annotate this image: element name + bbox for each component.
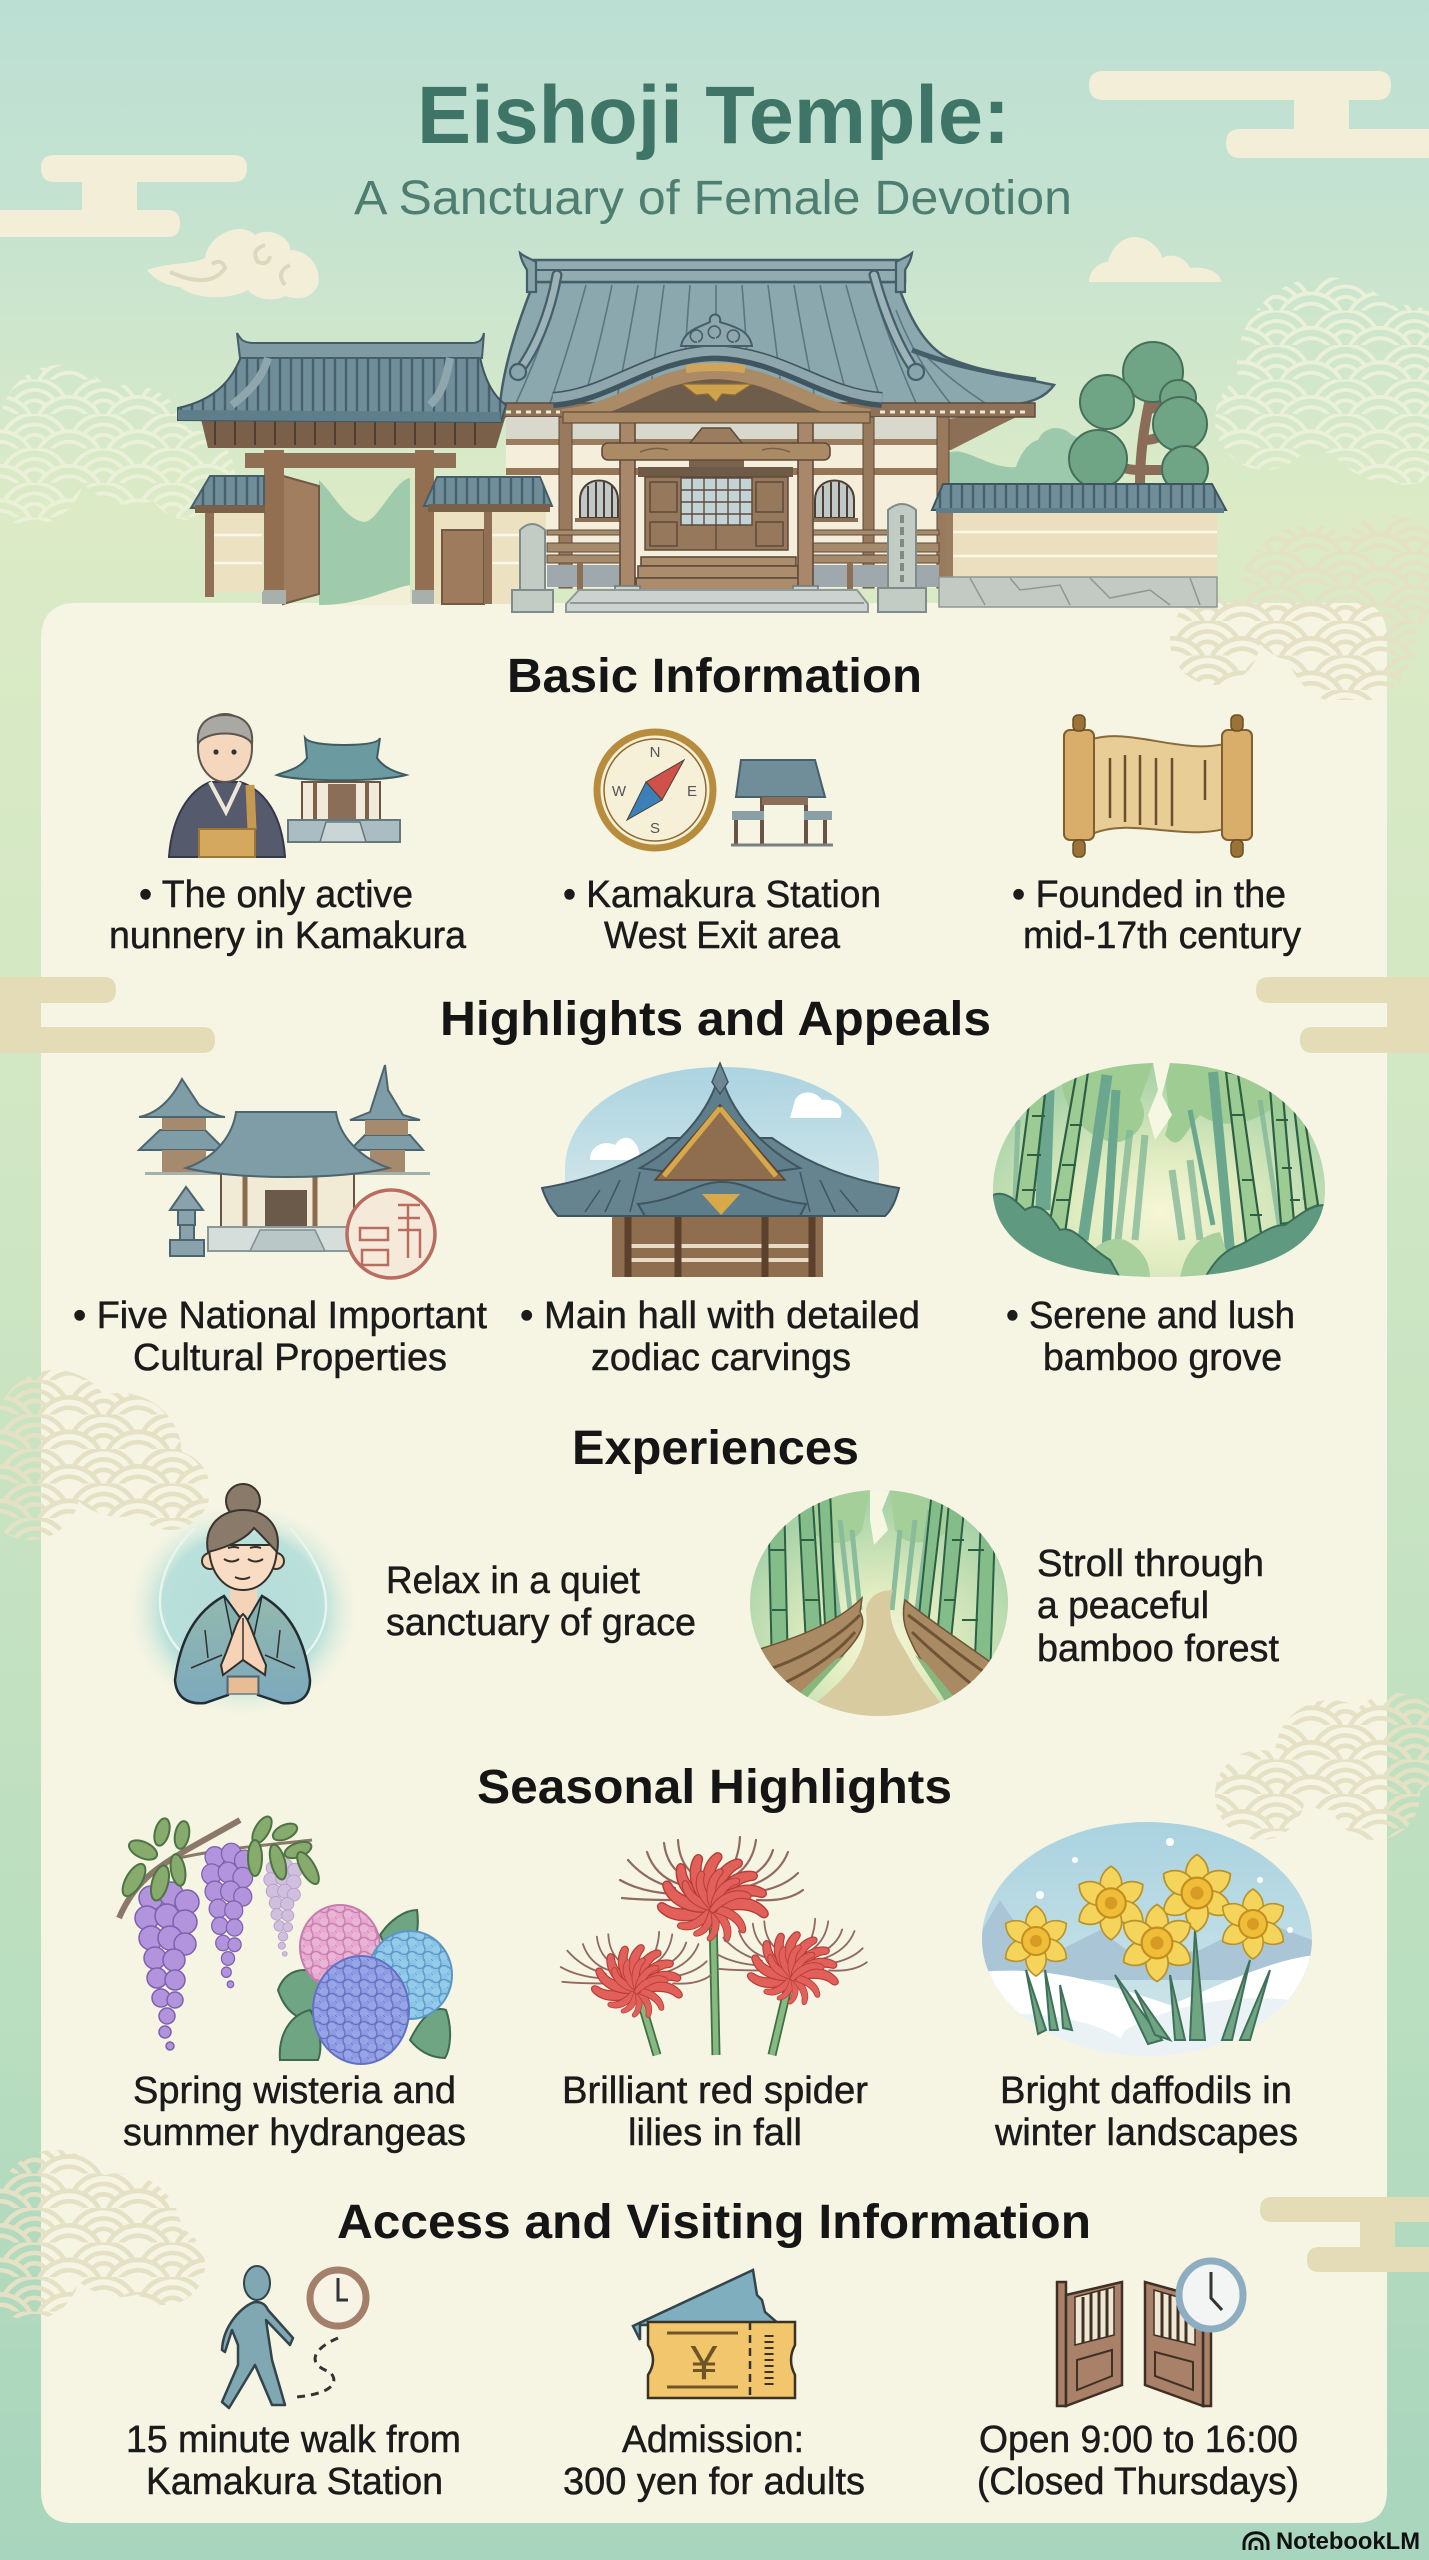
cloud band: middle left [0, 977, 215, 1053]
icon: compass and gate: S [650, 820, 660, 837]
logo: NotebookLM: NotebookLM [1276, 2528, 1420, 2555]
text: grove: • Serene and lush [1006, 1295, 1295, 1337]
text: station: West Exit area [604, 915, 841, 957]
icon: compass and gate: E [687, 783, 697, 800]
icon: red spider lilies [561, 1837, 867, 2055]
text: relax: Relax in a quiet [386, 1560, 640, 1602]
seigaiha pattern: panel left upper [0, 1370, 209, 1540]
text: founded [1012, 874, 1301, 957]
text: stroll [1037, 1543, 1279, 1670]
text: daffodils: winter landscapes [994, 2112, 1298, 2154]
text: grove: bamboo grove [1043, 1337, 1282, 1379]
right wall [932, 484, 1226, 607]
text: grove [1006, 1295, 1295, 1379]
text: spider lilies [562, 2070, 868, 2154]
text: founded: • Founded in the [1012, 874, 1286, 916]
text: nunnery [109, 874, 467, 957]
opening bushes and path [319, 478, 410, 605]
icon: bamboo grove [990, 1060, 1330, 1282]
gable [553, 314, 882, 423]
text: hours [977, 2419, 1299, 2503]
icon: nun and shrine [169, 714, 406, 857]
text: nunnery: nunnery in Kamakura [109, 915, 467, 957]
eaves and hall underside [503, 403, 1035, 450]
text: nunnery: • The only active [139, 874, 413, 916]
text: admission [563, 2419, 865, 2503]
text: admission: Admission: [622, 2419, 804, 2461]
text: admission: 300 yen for adults [563, 2461, 865, 2503]
heading: highlights and appeals: Highlights and Appeals [440, 993, 991, 1046]
icon: compass and gate: N [650, 744, 660, 761]
text: main hall: zodiac carvings [591, 1337, 851, 1379]
text: spider lilies: lilies in fall [628, 2112, 802, 2154]
main roof [500, 253, 1054, 405]
illustration: temple [178, 253, 1226, 612]
text: daffodils [994, 2070, 1298, 2154]
cloud band: middle right [1256, 977, 1429, 1053]
heading: access and visiting information: Access and Visiting Information [337, 2196, 1091, 2249]
icon: open gate and clock [1057, 2261, 1243, 2406]
text: walk: 15 minute walk from [126, 2419, 461, 2461]
text: spider lilies: Brilliant red spider [562, 2070, 868, 2112]
text: main hall: • Main hall with detailed [520, 1295, 920, 1337]
seigaiha pattern: lower right [1150, 510, 1429, 700]
small inner gate [424, 477, 552, 604]
text: wisteria [123, 2070, 466, 2154]
text: properties: Cultural Properties [133, 1337, 447, 1379]
cloud: top left [0, 155, 247, 237]
seigaiha pattern: upper right [1215, 277, 1429, 485]
text: stroll: Stroll through [1037, 1543, 1264, 1585]
text: relax [386, 1560, 696, 1644]
subtitle: A Sanctuary of Female Devotion [354, 172, 1072, 225]
text: properties: • Five National Important [73, 1295, 487, 1337]
text: station [563, 874, 881, 957]
seigaiha pattern: upper left [0, 360, 240, 530]
title: Eishoji Temple: [417, 70, 1010, 161]
icon: compass and gate: W [612, 783, 627, 800]
cloud: small right [1089, 237, 1221, 282]
icon: wisteria and hydrangea [118, 1814, 452, 2064]
icon: main hall under sky [542, 1060, 899, 1277]
icon: bamboo path [750, 1490, 1010, 1716]
heading: seasonal highlights: Seasonal Highlights [477, 1761, 952, 1814]
seigaiha pattern: panel right [1200, 1690, 1429, 1840]
text: walk [126, 2419, 461, 2503]
text: properties [73, 1295, 487, 1379]
icon: ticket: ¥ [690, 2337, 718, 2390]
left side wall [191, 476, 265, 597]
gate [178, 333, 506, 604]
text: hours: (Closed Thursdays) [977, 2461, 1299, 2503]
text: relax: sanctuary of grace [386, 1602, 696, 1644]
monuments [512, 504, 926, 612]
text: station: • Kamakura Station [563, 874, 881, 916]
text: stroll: a peaceful [1037, 1585, 1209, 1627]
icon: ticket [633, 2270, 795, 2398]
icon: compass and gate [597, 732, 833, 848]
tree and bushes [948, 342, 1208, 492]
text: hours: Open 9:00 to 16:00 [979, 2419, 1298, 2461]
cloud: swirl [147, 229, 319, 299]
icon: praying woman [130, 1484, 356, 1714]
panel: content card [41, 603, 1387, 2523]
hall body [506, 417, 949, 612]
icon: walker and clock [222, 2266, 366, 2408]
heading: experiences: Experiences [572, 1422, 859, 1475]
cloud: top right [1089, 71, 1429, 158]
text: walk: Kamakura Station [146, 2461, 443, 2503]
text: main hall [520, 1295, 920, 1379]
text: stroll: bamboo forest [1037, 1628, 1279, 1670]
text: daffodils: Bright daffodils in [1000, 2070, 1292, 2112]
icon: scroll [1064, 715, 1252, 857]
icon: daffodils in snow [980, 1820, 1315, 2060]
text: founded: mid-17th century [1023, 915, 1301, 957]
heading: basic information: Basic Information [507, 650, 922, 703]
icon: temple complex and seal [139, 1065, 435, 1278]
text: wisteria: summer hydrangeas [123, 2112, 466, 2154]
cloud band: bottom right [1260, 2197, 1429, 2272]
seigaiha pattern: panel left lower [0, 2150, 205, 2320]
text: wisteria: Spring wisteria and [133, 2070, 456, 2112]
